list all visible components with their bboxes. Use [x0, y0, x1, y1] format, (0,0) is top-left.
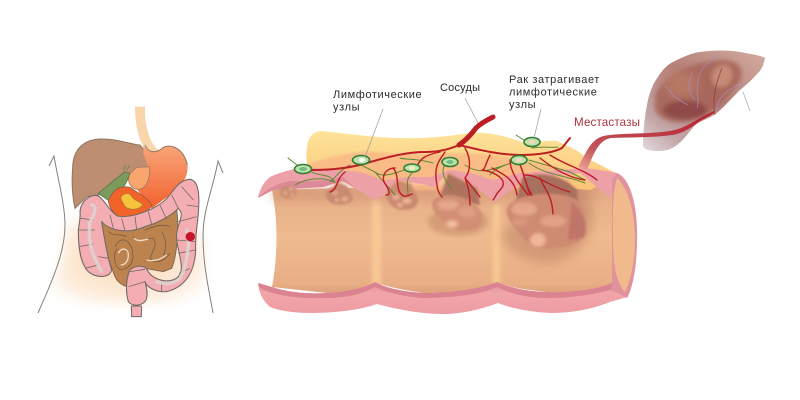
esophagus	[135, 107, 170, 170]
fat layer	[306, 131, 620, 190]
tumor 5	[507, 174, 586, 249]
lymph node: affected lower	[511, 156, 527, 164]
small intestine	[102, 208, 178, 287]
tumor marker	[186, 232, 195, 241]
rectum	[131, 306, 142, 317]
tumor 2	[326, 182, 353, 204]
liver	[72, 139, 150, 208]
label: lymph nodes: Лимфотические	[333, 89, 422, 101]
pancreas area	[108, 187, 152, 217]
tumor 1	[280, 186, 296, 198]
liver vessels	[665, 55, 745, 110]
liver body	[643, 50, 765, 151]
colon cross-section	[258, 117, 637, 314]
lymph node: affected upper	[524, 138, 540, 146]
pancreas	[121, 194, 143, 209]
liver pointer line	[743, 92, 750, 111]
label: cancer affects lymph nodes: лимфотические	[509, 86, 597, 98]
liver shading	[655, 60, 742, 122]
label: cancer affects lymph nodes: узлы	[509, 99, 536, 111]
duodenum loop	[128, 167, 150, 189]
upper wall	[258, 168, 617, 202]
lymph node: left edge	[294, 164, 312, 174]
colon highlight	[89, 205, 188, 283]
label: metastases: Местастазы	[574, 116, 640, 129]
lymph node: centre	[404, 164, 420, 172]
colon folds	[79, 187, 198, 292]
label: lymph nodes: узлы	[333, 102, 360, 114]
metastasis vessel	[578, 111, 714, 170]
torso glow	[45, 215, 210, 305]
pointer lines	[365, 98, 541, 157]
stomach	[128, 145, 188, 208]
liver illustration	[643, 50, 765, 151]
blood vessels	[312, 117, 597, 214]
lymph vessels	[288, 135, 585, 195]
orange under-layer	[292, 152, 575, 190]
lymph node: right of centre	[442, 158, 458, 166]
lymph node: labelled	[352, 156, 370, 164]
gallbladder	[98, 172, 130, 202]
inner shadows	[272, 186, 600, 202]
torso outline	[38, 156, 223, 313]
bowel end ring	[612, 173, 637, 298]
tumor 4	[432, 173, 483, 230]
tumor 3	[387, 180, 418, 210]
haustral folds	[372, 200, 381, 285]
colon lumen	[272, 180, 622, 295]
lower wall	[258, 282, 627, 314]
abdomen diagram	[38, 107, 223, 317]
label: cancer affects lymph nodes: Рак затрагивает	[509, 74, 600, 86]
infographic canvas	[38, 50, 765, 318]
label: vessels: Сосуды	[440, 82, 480, 94]
colon	[78, 179, 199, 305]
upper wall lower shade, left	[258, 177, 355, 198]
